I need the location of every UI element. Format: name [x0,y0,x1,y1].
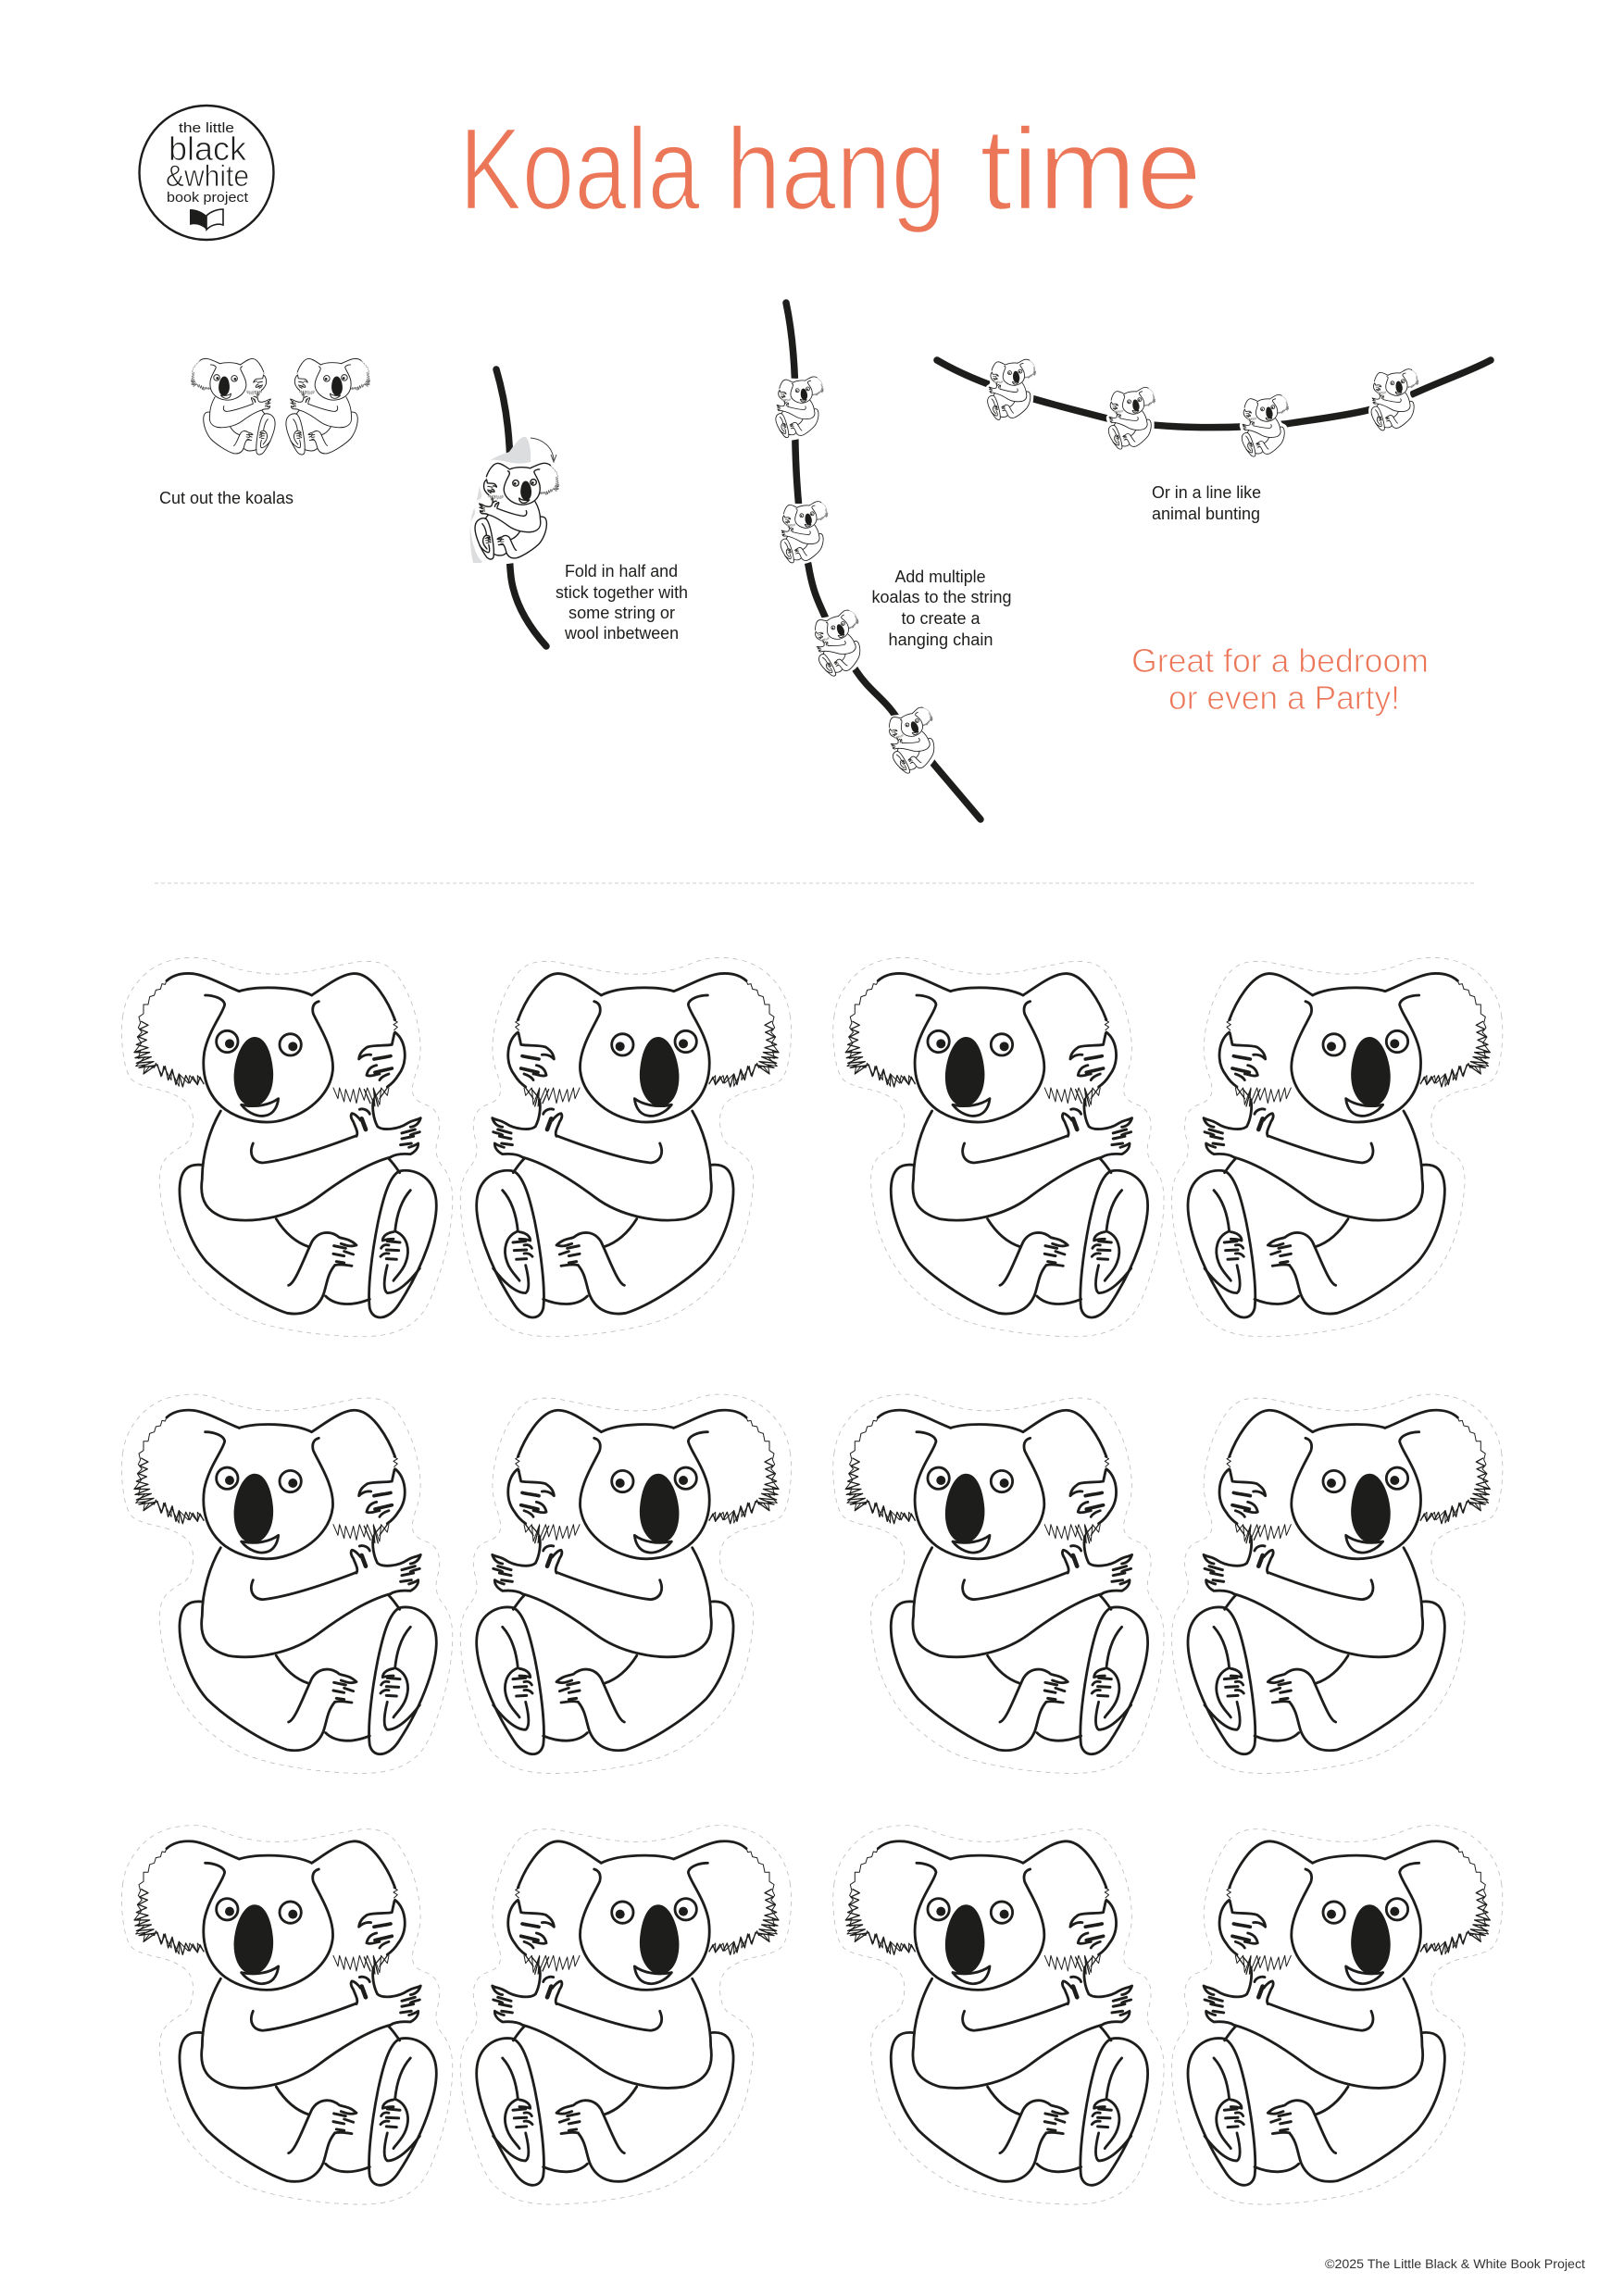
step 2: fold illustration [470,369,563,646]
copyright footer: ©2025 The Little Black & White Book Project [1325,2256,1585,2271]
title [459,104,1202,234]
logo: the little black & white book project: black [169,130,247,168]
cut-out sheet: koala pairs [121,957,1503,2204]
step 3 text [872,568,1011,649]
step 3 text: to create a [902,609,981,628]
step 2 text: wool inbetween [564,624,679,643]
title: hang [726,104,946,234]
step 4 text [1152,483,1261,523]
step 3 text: koalas to the string [872,588,1011,606]
step 2 text: Fold in half and [565,562,678,580]
step 4: koala bunting [937,356,1491,461]
callout: great for a bedroom [1131,642,1429,717]
step 1 text: Cut out the koalas [159,489,294,507]
step 3 text: Add multiple [894,568,985,586]
step 3 text: hanging chain [889,630,993,649]
logo: the little black & white book project: book project [167,190,249,206]
title: Koala [459,104,701,234]
logo: the little black & white book project: the little [179,120,234,136]
callout: great for a bedroom: or even a Party! [1168,679,1400,717]
step 1: two small koalas [191,358,370,455]
step 2 text: some string or [568,604,675,622]
step 2 text: stick together with [556,583,688,602]
logo: the little black & white book project [139,106,274,240]
step 4 text: animal bunting [1152,505,1260,523]
logo: the little black & white book project: &white [166,159,249,193]
title: time [980,104,1202,234]
step 4 text: Or in a line like [1152,483,1261,502]
step 3: hanging chain [768,303,981,819]
step 2 text [556,562,688,643]
callout: great for a bedroom: Great for a bedroom [1131,642,1429,680]
